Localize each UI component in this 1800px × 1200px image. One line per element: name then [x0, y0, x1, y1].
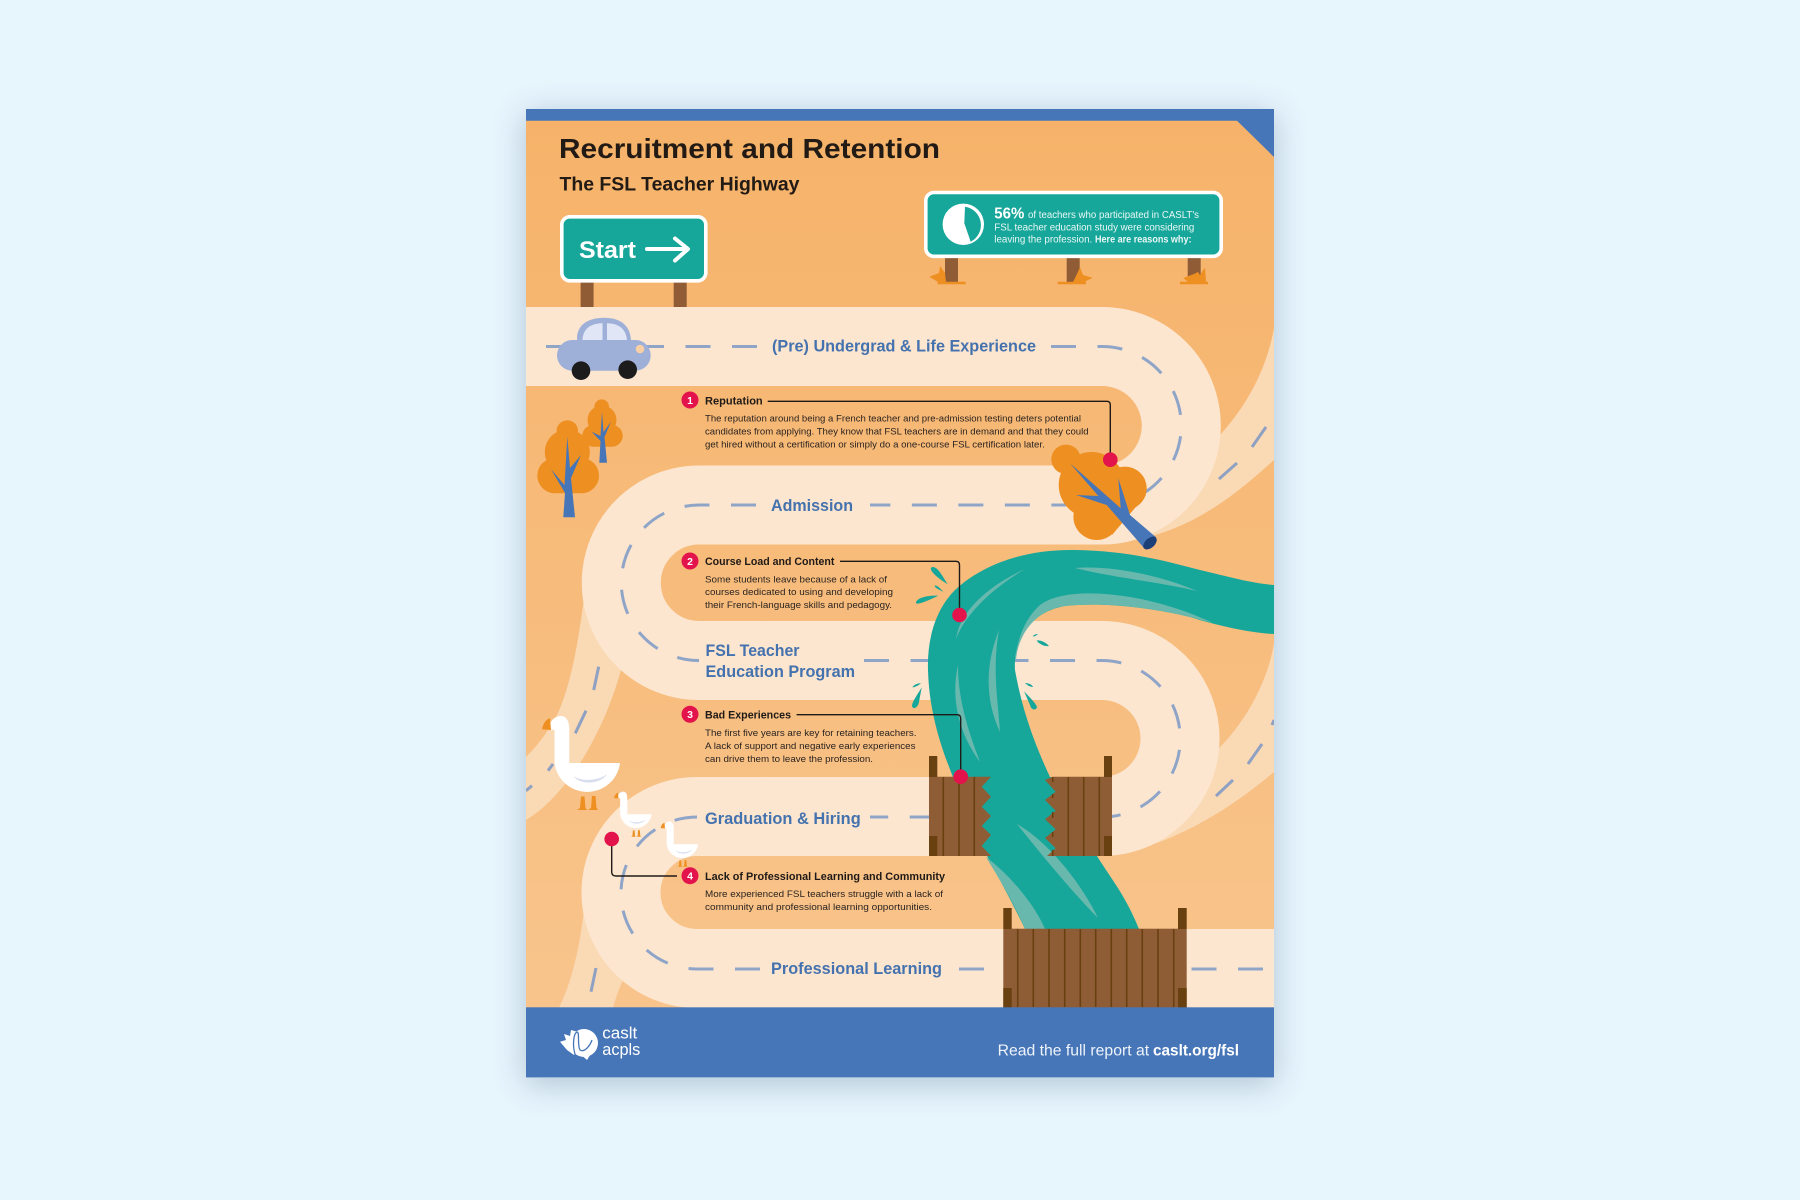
- callout 2: course load and content: 2: [687, 556, 693, 568]
- label: FSL teacher education program: FSL Teacher: [706, 641, 800, 660]
- label: FSL teacher education program: [706, 641, 855, 681]
- callout 1: reputation: get hired without a certification or simply do a one-course FSL certification later.: [705, 439, 1045, 450]
- callout 4: lack of professional learning and community: community and professional learning opportunities.: [705, 902, 932, 913]
- callout 1: reputation: The reputation around being a French teacher and pre-admission testing deters potential: [705, 414, 1081, 425]
- logo wordmark: acpls: [602, 1041, 640, 1059]
- report link: Read the full report at: [998, 1043, 1150, 1060]
- logo wordmark: [602, 1024, 640, 1059]
- secondary road: left: [526, 602, 621, 820]
- callout 4: lack of professional learning and community: 4: [687, 870, 693, 882]
- callout 1: reputation: Reputation: [705, 395, 763, 407]
- top blue bar: [526, 109, 1274, 157]
- callout 2: course load and content: courses dedicated to using and developing: [705, 587, 893, 598]
- label: professional learning: Professional Learning: [771, 959, 942, 978]
- secondary road dashes: [526, 427, 1274, 992]
- callout 2: course load and content: Course Load and Content: [705, 556, 835, 568]
- statistic text: 56%: [994, 205, 1025, 222]
- statistic text: [994, 205, 1199, 245]
- water splashes: [912, 567, 1049, 709]
- subtitle: The FSL Teacher Highway: [560, 174, 800, 196]
- sign posts and grass: [929, 256, 1208, 284]
- statistic text: Here are reasons why:: [1095, 234, 1192, 245]
- poster: [520, 109, 1280, 1078]
- logo wordmark: caslt: [602, 1024, 638, 1042]
- river: [928, 550, 1274, 929]
- callout 3: bad experiences: Bad Experiences: [705, 709, 791, 721]
- statistic text: leaving the profession.: [994, 234, 1092, 245]
- callout 1: reputation: 1: [687, 395, 693, 407]
- secondary road: bottom left: [560, 914, 623, 1008]
- label: FSL teacher education program: Education Program: [706, 662, 855, 681]
- secondary road: upper right: [1135, 328, 1274, 540]
- footer: [526, 1007, 1274, 1078]
- callout 3: bad experiences: [682, 706, 968, 784]
- small bridge left: [929, 756, 991, 856]
- title: Recruitment and Retention: [559, 133, 940, 164]
- statistic sign: [926, 192, 1221, 284]
- label: graduation and hiring: Graduation & Hiring: [705, 809, 861, 828]
- report link: caslt.org/fsl: [1153, 1043, 1239, 1060]
- icon: small tree: [582, 399, 623, 463]
- icon: fallen tree: [1051, 445, 1159, 552]
- small bridge right: [1045, 756, 1112, 856]
- callout 1: reputation: [682, 392, 1118, 467]
- label: admission: Admission: [771, 496, 853, 515]
- callout 2: course load and content: [682, 552, 967, 622]
- callout 3: bad experiences: The first five years are key for retaining teachers.: [705, 728, 916, 739]
- callout 2: course load and content: Some students leave because of a lack of: [705, 574, 887, 585]
- icon: large goose: [542, 716, 620, 810]
- statistic text: of teachers who participated in CASLT's: [1028, 210, 1199, 221]
- large bridge: [1003, 908, 1187, 1008]
- pie chart 56 percent: [943, 204, 984, 245]
- icon: small goose two: [661, 822, 698, 867]
- main highway: [520, 346, 1280, 968]
- report link: [998, 1043, 1239, 1060]
- road centre dashes: [546, 346, 1270, 969]
- callout 4: lack of professional learning and community: Lack of Professional Learning and Community: [705, 871, 946, 883]
- secondary road: lower right: [1153, 644, 1274, 844]
- icon: logo maple leaf: [560, 1029, 598, 1060]
- callout 4: lack of professional learning and community: [604, 832, 946, 913]
- callout 1: reputation: candidates from applying. They know that FSL teachers are in demand and that they could: [705, 426, 1089, 438]
- heading: [560, 138, 938, 194]
- start sign: [562, 217, 706, 307]
- start sign: Start: [579, 237, 636, 264]
- label: pre undergrad: (Pre) Undergrad & Life Experience: [772, 337, 1036, 356]
- callout 3: bad experiences: 3: [687, 709, 693, 721]
- callout 3: bad experiences: can drive them to leave the profession.: [705, 754, 873, 765]
- icon: large tree: [537, 420, 599, 517]
- callout 3: bad experiences: A lack of support and negative early experiences: [705, 741, 916, 752]
- icon: small goose one: [614, 792, 652, 837]
- orange background: [526, 109, 1274, 1078]
- callout 4: lack of professional learning and community: More experienced FSL teachers struggle with a lack of: [705, 889, 943, 900]
- icon: car: [557, 318, 651, 380]
- statistic text: FSL teacher education study were considering: [994, 222, 1194, 234]
- callout 2: course load and content: their French-language skills and pedagogy.: [705, 600, 892, 611]
